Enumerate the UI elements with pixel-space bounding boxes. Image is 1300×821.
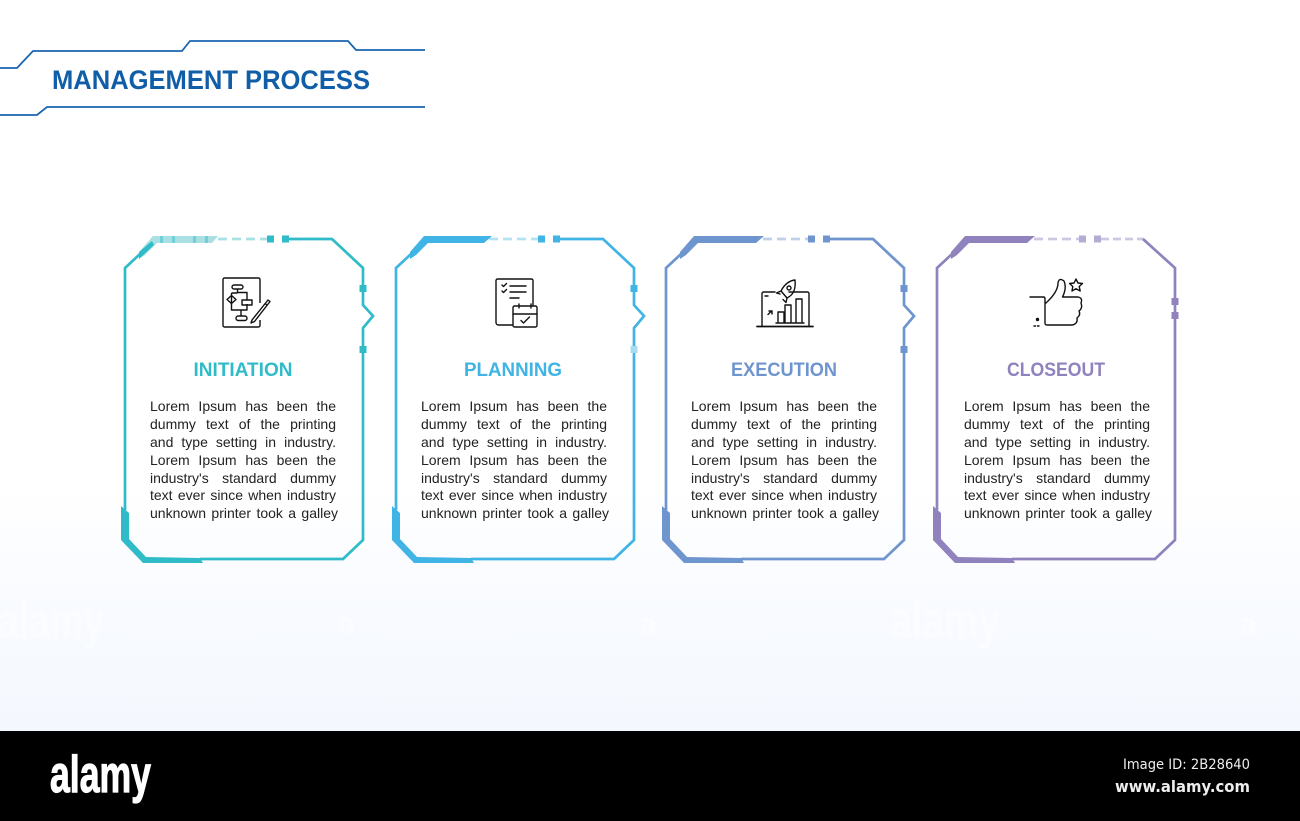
text block: closeout description: dummy text of the printing bbox=[964, 416, 1150, 432]
text block: planning description: unknown printer took a galley bbox=[421, 505, 609, 521]
text block: closeout description: Lorem Ipsum has been the bbox=[964, 398, 1150, 414]
watermark: faint alamy marks: a bbox=[1240, 608, 1257, 641]
text block: planning description: Lorem Ipsum has been the bbox=[421, 398, 607, 414]
heading: execution: EXECUTION bbox=[731, 360, 837, 381]
text block: planning description: text ever since when industry bbox=[421, 487, 607, 503]
text block: closeout description: unknown printer took a galley bbox=[964, 505, 1152, 521]
footer: alamy black bar bbox=[0, 731, 1300, 821]
text: image id: Image ID: 2B28640 bbox=[1123, 757, 1250, 773]
panel: closeout bbox=[933, 236, 1178, 563]
watermark: faint alamy marks bbox=[0, 590, 1300, 660]
panel: planning bbox=[392, 236, 646, 563]
text block: closeout description: industry's standard dummy bbox=[964, 470, 1150, 486]
logo: alamy: alamy bbox=[50, 746, 151, 804]
watermark: faint alamy marks: a bbox=[338, 608, 355, 641]
panel: initiation bbox=[121, 236, 375, 563]
text block: planning description bbox=[421, 398, 609, 521]
text block: initiation description bbox=[150, 398, 338, 521]
text block: closeout description: text ever since when industry bbox=[964, 487, 1150, 503]
text block: planning description: dummy text of the printing bbox=[421, 416, 607, 432]
heading: planning: PLANNING bbox=[464, 360, 562, 381]
text block: closeout description: and type setting in industry. bbox=[964, 434, 1150, 450]
text block: execution description: text ever since when industry bbox=[691, 487, 877, 503]
text block: closeout description: Lorem Ipsum has been the bbox=[964, 452, 1150, 468]
icon: rocket launching from laptop chart bbox=[756, 279, 814, 328]
heading: management process: MANAGEMENT PROCESS bbox=[52, 65, 370, 95]
title banner bbox=[0, 40, 425, 116]
text block: execution description: industry's standard dummy bbox=[691, 470, 877, 486]
text block: initiation description: Lorem Ipsum has been the bbox=[150, 398, 336, 414]
text block: initiation description: dummy text of the printing bbox=[150, 416, 336, 432]
heading: initiation: INITIATION bbox=[194, 360, 292, 381]
text block: execution description: and type setting in industry. bbox=[691, 434, 877, 450]
text block: initiation description: unknown printer took a galley bbox=[150, 505, 338, 521]
text block: execution description: Lorem Ipsum has been the bbox=[691, 398, 877, 414]
text block: closeout description bbox=[964, 398, 1152, 521]
text block: initiation description: industry's standard dummy bbox=[150, 470, 336, 486]
text block: execution description bbox=[691, 398, 879, 521]
icon: checklist with calendar bbox=[495, 278, 538, 328]
text block: planning description: industry's standard dummy bbox=[421, 470, 607, 486]
watermark: faint alamy marks: alamy bbox=[890, 592, 1000, 650]
text block: execution description: Lorem Ipsum has been the bbox=[691, 452, 877, 468]
text block: initiation description: text ever since when industry bbox=[150, 487, 336, 503]
text: website: www.alamy.com bbox=[1115, 777, 1250, 796]
watermark: faint alamy marks: alamy bbox=[0, 592, 104, 650]
text block: initiation description: and type setting in industry. bbox=[150, 434, 336, 450]
text block: planning description: and type setting in industry. bbox=[421, 434, 607, 450]
panel: execution bbox=[662, 236, 916, 563]
heading: closeout: CLOSEOUT bbox=[1007, 360, 1105, 381]
text block: planning description: Lorem Ipsum has been the bbox=[421, 452, 607, 468]
text block: execution description: unknown printer took a galley bbox=[691, 505, 879, 521]
text block: execution description: dummy text of the printing bbox=[691, 416, 877, 432]
icon: thumbs up with star bbox=[1029, 278, 1084, 327]
icon: flowchart with pen bbox=[222, 277, 271, 328]
watermark: faint alamy marks: a bbox=[640, 608, 657, 641]
text block: initiation description: Lorem Ipsum has been the bbox=[150, 452, 336, 468]
